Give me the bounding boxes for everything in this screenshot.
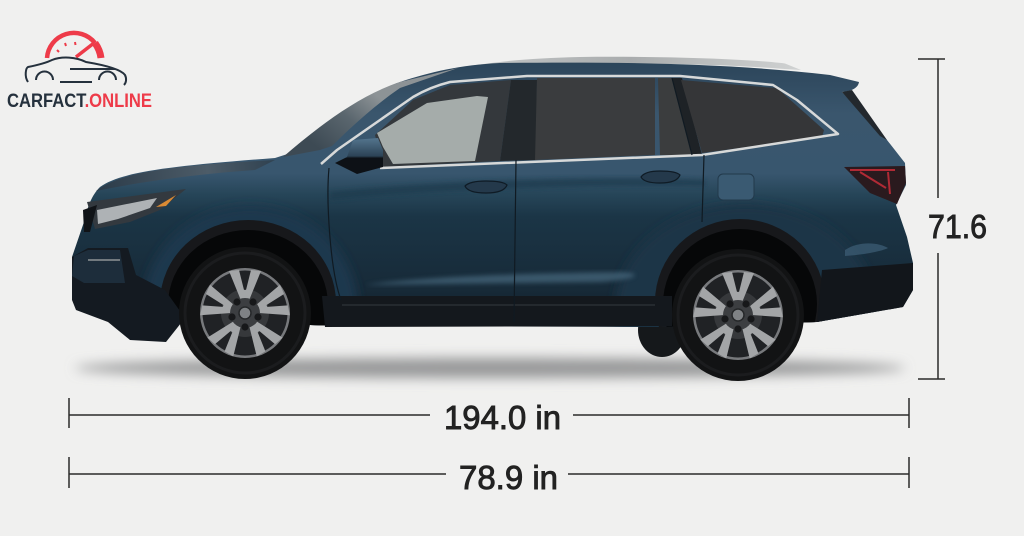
rear bumper — [817, 263, 913, 322]
ground shadow — [75, 358, 905, 378]
rear wheel arch — [655, 219, 822, 327]
front bumper — [72, 248, 185, 342]
logo: CARFACT.ONLINE — [7, 33, 152, 112]
headlight — [87, 189, 186, 229]
icon: car outline — [26, 58, 126, 85]
logo text: CARFACT.ONLINE — [7, 90, 152, 112]
mirror — [335, 138, 383, 174]
rear quarter window — [681, 80, 824, 153]
rear wheel — [672, 249, 804, 381]
length label: 194.0 in — [444, 399, 561, 436]
windshield — [283, 68, 458, 157]
door reflection — [365, 272, 635, 285]
door crease shadow — [330, 178, 705, 200]
chrome window trim — [321, 76, 838, 168]
front wheel arch — [162, 220, 336, 326]
vehicle: blue SUV — [72, 57, 913, 416]
dimension: width 78.9 in — [69, 457, 909, 496]
sill — [322, 296, 672, 327]
far rear wheel — [638, 303, 686, 357]
door handle rear — [641, 171, 680, 183]
taillight — [844, 166, 906, 204]
roof rail — [460, 57, 801, 70]
height label: 71.6 — [928, 208, 987, 245]
icon: speedometer arc — [47, 33, 101, 58]
door handle front — [465, 181, 507, 193]
fuel door — [718, 174, 754, 200]
dimension: height 71.6 — [918, 59, 987, 379]
body — [72, 63, 913, 327]
small rear door window — [658, 78, 692, 155]
fender shading — [146, 217, 876, 327]
pillars — [500, 80, 537, 161]
dimension: length 194.0 in — [69, 398, 909, 436]
rear glass — [842, 90, 887, 140]
front window frame — [375, 80, 511, 167]
hood surface — [96, 160, 275, 191]
front wheel — [179, 247, 311, 379]
width label: 78.9 in — [459, 459, 558, 496]
grille — [83, 205, 97, 232]
door seams — [328, 78, 704, 322]
middle window — [535, 78, 655, 160]
front window light glass — [377, 96, 488, 164]
